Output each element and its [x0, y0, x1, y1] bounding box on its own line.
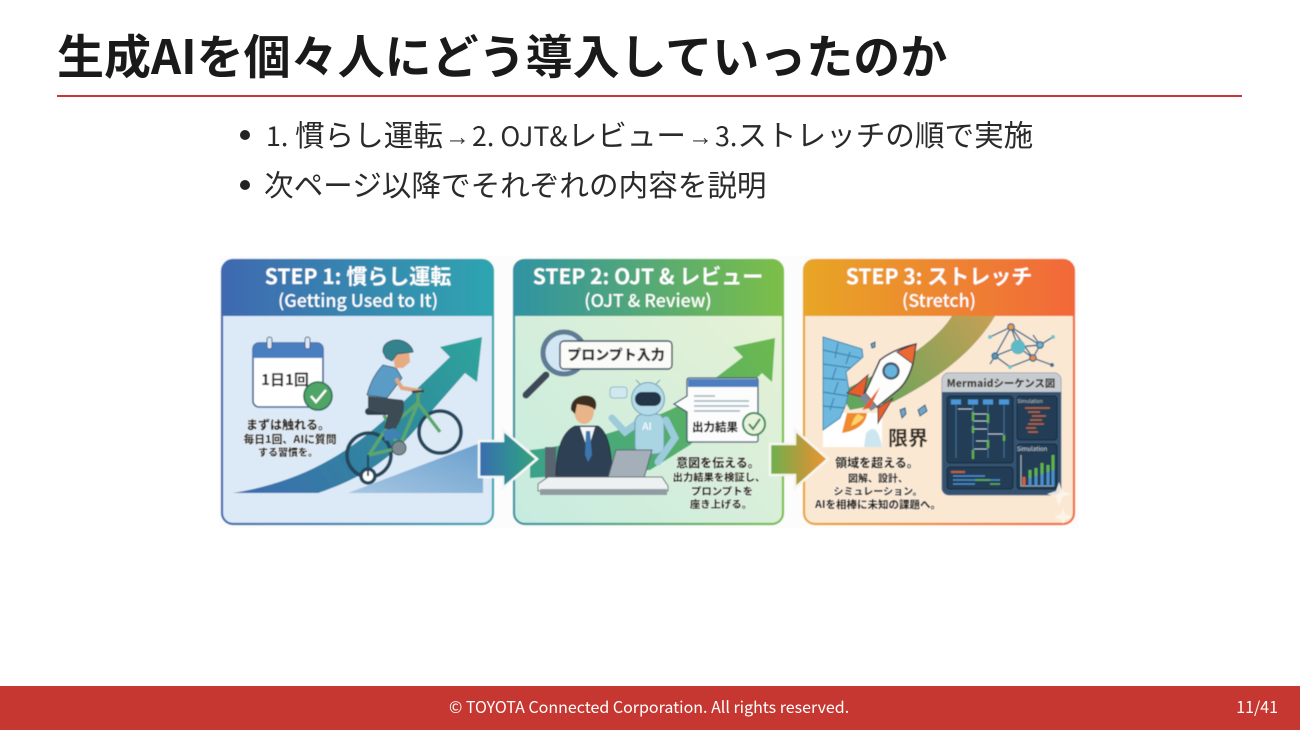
icon: network graph — [988, 324, 1055, 369]
step 2 header — [513, 259, 783, 316]
step 3 caption: シミュレーション。 — [834, 483, 922, 498]
icon: output window: 出力結果 — [692, 419, 738, 435]
step 1 header — [222, 259, 493, 316]
bullet: step order: 3.ストレッチの順で実施 — [715, 112, 1033, 155]
step 3 body — [804, 260, 1074, 524]
title rule — [57, 95, 1242, 97]
step 1 body — [222, 260, 493, 524]
page number: 11/41 — [1236, 694, 1278, 718]
panel: step 2 — [513, 259, 783, 524]
step 3 subheading: (Stretch) — [902, 287, 976, 313]
step 3 caption: AIを相棒に未知の課題へ。 — [814, 497, 941, 512]
step 2 caption: 意図を伝える。 — [676, 454, 760, 471]
step 1 subheading: (Getting Used to It) — [278, 287, 438, 313]
arrow: step 2 to step 3 — [770, 430, 828, 488]
icon: rocket — [842, 344, 916, 433]
icon: cyclist on training-wheel bike — [347, 340, 461, 483]
bar chart panel: Simulation — [1017, 444, 1048, 453]
step 3 caption: 領域を超える。 — [835, 454, 919, 471]
bullet: next pages: 次ページ以降でそれぞれの内容を説明 — [264, 162, 767, 205]
icon: robot: AI — [641, 418, 652, 433]
step 3 heading: STEP 3: ストレッチ — [846, 261, 1032, 291]
bullet: step order — [240, 112, 1033, 155]
step 2 caption: プロンプトを — [691, 483, 753, 498]
dashboard: Mermaid sequence diagram: Mermaidシーケンス図 — [947, 375, 1055, 390]
icon: laptop and desk — [538, 450, 668, 495]
bullet: step order: → — [688, 123, 713, 151]
icon: output window — [674, 378, 765, 442]
icon: calendar — [253, 337, 332, 410]
step 3 caption: 図解、設計、 — [848, 470, 908, 485]
step 2 caption — [673, 454, 765, 511]
step 2 body — [514, 260, 783, 524]
slope — [348, 442, 483, 493]
icon: businessman at laptop — [545, 396, 612, 478]
bullet: step order: 2. OJT&レビュー — [472, 112, 686, 155]
step 2 heading: STEP 2: OJT & レビュー — [533, 261, 763, 291]
bullet: step order: 1. 慣らし運転 — [266, 112, 443, 155]
footer bar — [0, 686, 1300, 730]
step 2 caption: 出力結果を検証し、 — [673, 469, 765, 484]
step 1 caption: 毎日1回、AIに質問 — [243, 431, 337, 447]
step 2 subheading: (OJT & Review) — [584, 287, 712, 313]
title: 生成AIを個々人にどう導入していったのか — [57, 19, 947, 88]
bullet list — [240, 112, 1033, 205]
step 3 caption — [814, 454, 941, 512]
icon: debris — [871, 342, 927, 418]
step 3 header — [803, 259, 1075, 316]
rising arrow — [530, 338, 775, 478]
panel: step 3 — [803, 259, 1075, 524]
limit label: 限界 — [888, 422, 928, 451]
dashboard: Mermaid sequence diagram — [942, 373, 1061, 495]
icon: cracked brick wall — [823, 337, 882, 447]
icon: calendar: 1日1回 — [261, 369, 309, 390]
rising arrow — [233, 337, 482, 493]
swoosh — [840, 316, 995, 410]
step 2 caption: 座き上げる。 — [690, 496, 752, 511]
bullet: step order: → — [445, 123, 470, 151]
copyright: © TOYOTA Connected Corporation. All rights reserved. — [449, 694, 849, 718]
sparkles — [1047, 482, 1072, 524]
log panel — [947, 467, 1013, 489]
step 1 caption — [243, 416, 337, 459]
step 1 caption: まずは触れる。 — [246, 416, 330, 433]
arrow: step 1 to step 2 — [479, 430, 537, 488]
icon: magnifier with prompt box: プロンプト入力 — [567, 345, 665, 365]
code panel: Simulation — [1017, 398, 1043, 405]
step 1 caption: する習慣を。 — [258, 444, 318, 459]
panel: step 1 — [222, 259, 493, 524]
icon: magnifier with prompt box — [526, 332, 672, 395]
image backdrop — [219, 256, 1079, 528]
sequence panel — [947, 396, 1013, 463]
step 1 heading: STEP 1: 慣らし運転 — [265, 261, 451, 291]
three step illustration — [220, 258, 1076, 526]
icon: robot — [610, 380, 675, 462]
